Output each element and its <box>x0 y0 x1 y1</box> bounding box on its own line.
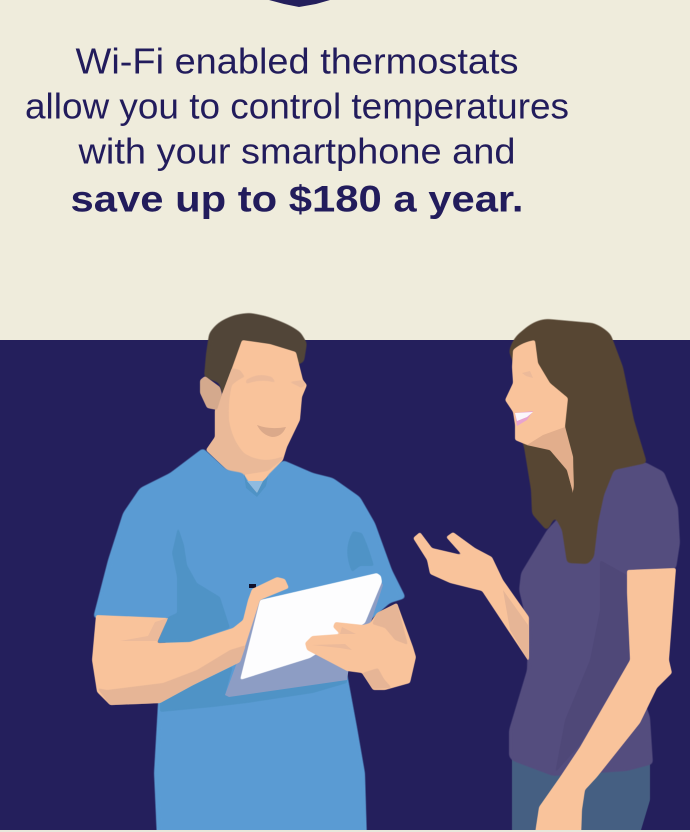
gesturing arm shading <box>503 590 528 660</box>
man figure <box>92 313 416 832</box>
shirt fold shading <box>555 560 630 773</box>
bottom edge strip <box>0 830 690 832</box>
man brow and eye <box>246 375 306 388</box>
tablet back <box>225 575 383 697</box>
woman neck shading <box>527 427 573 493</box>
headline text: save up to $180 a year. <box>70 178 524 220</box>
woman face and neck <box>505 340 574 495</box>
woman right arm <box>534 568 676 832</box>
man face shading <box>206 368 284 475</box>
man hair <box>204 313 307 396</box>
man left arm and hand <box>92 577 289 705</box>
tablet <box>225 573 383 697</box>
headline text <box>25 40 569 220</box>
woman jeans <box>512 750 650 832</box>
woman brow <box>522 371 533 378</box>
man ear <box>200 376 222 410</box>
woman teeth <box>515 412 533 421</box>
headline text: allow you to control temperatures <box>25 86 569 126</box>
tablet screen <box>240 573 382 680</box>
man neck and face <box>206 340 307 496</box>
woman mouth <box>515 411 533 426</box>
woman figure <box>413 319 680 832</box>
man mouth <box>257 425 286 437</box>
headline text: Wi-Fi enabled thermostats <box>76 40 518 82</box>
collar shading <box>244 474 268 497</box>
man right arm and hand <box>305 603 416 690</box>
woman hair <box>509 319 647 564</box>
navy lower panel <box>0 340 690 830</box>
right arm shading <box>372 603 408 645</box>
pen <box>249 584 256 588</box>
arm shading <box>97 645 246 705</box>
blue shirt <box>93 448 406 832</box>
woman gesturing arm and hand <box>413 532 529 662</box>
undershirt collar <box>247 481 263 493</box>
shirt fold shadows <box>157 527 230 643</box>
woman shirt <box>509 462 680 776</box>
chevron arrow tip <box>269 0 330 7</box>
headline text: with your smartphone and <box>77 130 516 172</box>
